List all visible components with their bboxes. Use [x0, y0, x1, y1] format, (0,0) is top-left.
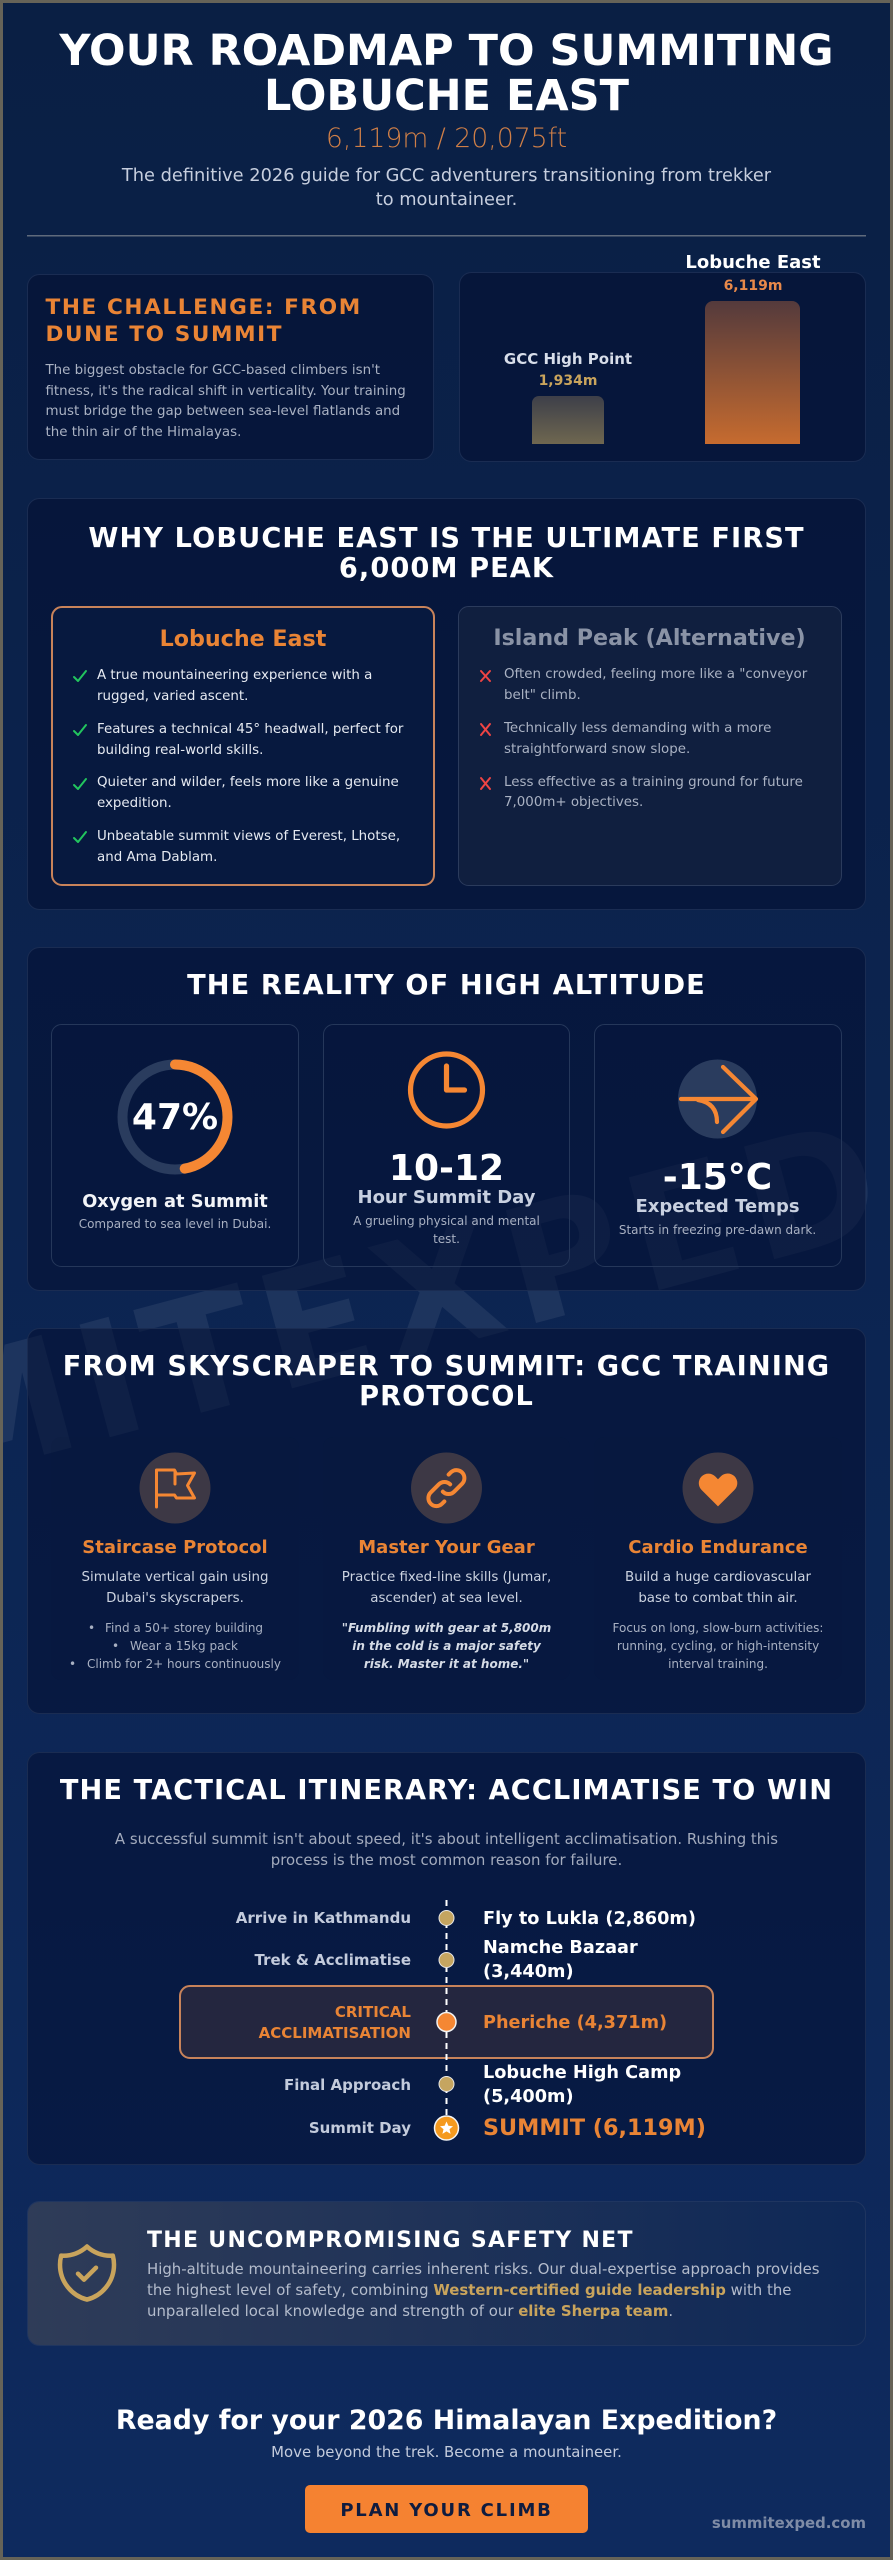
column: master your gear: ascender) at sea level. — [370, 1591, 523, 1606]
column: cardio endurance: Cardio Endurance — [628, 1537, 808, 1558]
icon: flag — [140, 1452, 210, 1524]
quote: risk. Master it at home." — [364, 1657, 529, 1671]
column: master your gear: Master Your Gear — [358, 1537, 535, 1558]
quote: "Fumbling with gear at 5,800m — [342, 1621, 551, 1635]
section heading: THE TACTICAL ITINERARY: ACCLIMATISE TO WIN — [60, 1775, 833, 1806]
bar: Lobuche East: Lobuche East — [685, 252, 821, 273]
CTA heading: Ready for your 2026 Himalayan Expedition? — [116, 2405, 777, 2436]
cross list: straightforward snow slope. — [504, 742, 690, 757]
column: staircase protocol: Staircase Protocol — [82, 1537, 268, 1558]
challenge text — [44, 363, 406, 440]
watermark — [3, 1141, 868, 1454]
critical highlight box — [180, 1986, 713, 2058]
cross list: Less effective as a training ground for future — [504, 775, 803, 790]
call to action — [116, 2405, 777, 2533]
icon: link — [411, 1452, 482, 1524]
stop: Pheriche: CRITICAL — [335, 2003, 411, 2021]
stop: Lobuche High Camp: Final Approach — [284, 2076, 411, 2094]
column: cardio endurance: running, cycling, or high-intensity — [617, 1639, 819, 1653]
section heading: WHY LOBUCHE EAST IS THE ULTIMATE FIRST — [88, 523, 805, 554]
bullet list: • — [112, 1639, 119, 1653]
icon: heart — [682, 1452, 754, 1524]
challenge heading: THE CHALLENGE: FROM — [46, 295, 362, 320]
donut chart 47%: 47% — [132, 1097, 218, 1138]
challenge text: must bridge the gap between sea-level flatlands and — [46, 404, 400, 419]
check list: building real-world skills. — [97, 743, 263, 758]
panel: the reality of high altitude — [28, 948, 866, 1290]
stop: summit — [309, 2115, 706, 2141]
cross list: Often crowded, feeling more like a "conveyor — [504, 667, 808, 682]
stop: Lobuche High Camp — [284, 2063, 681, 2107]
column: cardio endurance: interval training. — [668, 1657, 768, 1671]
panel: GCC training protocol — [28, 1328, 866, 1714]
section heading — [63, 1351, 830, 1412]
icon: shield — [60, 2247, 114, 2300]
challenge heading: DUNE TO SUMMIT — [46, 322, 283, 347]
quote — [342, 1621, 551, 1671]
column: staircase protocol: Simulate vertical gain using — [82, 1570, 268, 1585]
stop: Kathmandu / Lukla — [236, 1909, 696, 1929]
stop: Namche Bazaar: (3,440m) — [483, 1962, 574, 1982]
tagline: The definitive 2026 guide for GCC adventurers transitioning from trekker — [121, 165, 772, 186]
check list: Quieter and wilder, feels more like a genuine — [97, 775, 399, 790]
card: summit day: A grueling physical and mental — [353, 1214, 540, 1228]
bullet list: • — [88, 1621, 95, 1635]
card: oxygen: Compared to sea level in Dubai. — [79, 1217, 271, 1231]
panel: the challenge — [28, 274, 434, 460]
icon: clock — [410, 1054, 482, 1126]
stop: Namche Bazaar — [254, 1938, 638, 1982]
column: master your gear: Practice fixed-line skills (Jumar, — [342, 1570, 551, 1585]
cross list: belt" climb. — [504, 688, 581, 703]
column: cardio endurance: Focus on long, slow-burn activities: — [613, 1621, 823, 1635]
check list: Features a technical 45° headwall, perfect for — [97, 722, 404, 737]
safety heading: THE UNCOMPROMISING SAFETY NET — [147, 2228, 634, 2253]
CTA button: PLAN YOUR CLIMB — [340, 2500, 553, 2521]
safety text: unparalleled local knowledge and strength of our elite Sherpa team. — [147, 2302, 673, 2320]
safety text: the highest level of safety, combining Western-certified guide leadership with the — [147, 2281, 791, 2299]
card: temperature: Starts in freezing pre-dawn dark. — [619, 1223, 816, 1237]
card: Lobuche East: Lobuche East — [160, 626, 327, 652]
card: summit day — [324, 1024, 570, 1266]
section heading: 6,000M PEAK — [339, 553, 554, 584]
panel: altitude bar chart — [460, 252, 866, 462]
column: staircase protocol: Dubai's skyscrapers. — [106, 1591, 244, 1606]
bullet list — [69, 1621, 281, 1671]
bullet list: • — [69, 1657, 76, 1671]
card: Island Peak: Island Peak (Alternative) — [493, 625, 806, 651]
section heading: FROM SKYSCRAPER TO SUMMIT: GCC TRAINING — [63, 1351, 830, 1382]
tagline: to mountaineer. — [376, 189, 517, 210]
bullet list: Climb for 2+ hours continuously — [87, 1657, 281, 1671]
tagline — [121, 165, 772, 210]
check list: and Ama Dablam. — [97, 850, 217, 865]
card: temperature: Expected Temps — [635, 1196, 800, 1217]
header — [58, 26, 834, 210]
card: temperature: -15°C — [663, 1157, 772, 1198]
section heading: THE REALITY OF HIGH ALTITUDE — [187, 970, 706, 1001]
stop: Lobuche High Camp: (5,400m) — [483, 2087, 574, 2107]
card: summit day: test. — [433, 1232, 460, 1246]
quote: in the cold is a major safety — [352, 1639, 542, 1653]
stop: Pheriche — [259, 2003, 667, 2042]
section heading: PROTOCOL — [359, 1381, 534, 1412]
bar: Lobuche East: 6,119m — [724, 278, 782, 294]
icon: cold arrow — [678, 1060, 757, 1138]
bullet list: Wear a 15kg pack — [130, 1639, 238, 1653]
stop: Pheriche: Pheriche (4,371m) — [483, 2013, 667, 2033]
stop: Pheriche: ACCLIMATISATION — [259, 2024, 411, 2042]
cross list: 7,000m+ objectives. — [504, 795, 643, 810]
check list: A true mountaineering experience with a — [97, 668, 372, 683]
card: oxygen: Oxygen at Summit — [82, 1191, 268, 1212]
panel: tactical itinerary — [28, 1752, 866, 2164]
card: Island Peak — [458, 606, 842, 886]
card: summit day: Hour Summit Day — [358, 1187, 536, 1208]
bar: GCC high point: GCC High Point — [504, 350, 632, 368]
title — [58, 26, 834, 121]
card: Lobuche East — [52, 607, 434, 885]
card: oxygen — [52, 1024, 298, 1266]
challenge text: The biggest obstacle for GCC-based climbers isn't — [44, 363, 380, 378]
intro text — [115, 1830, 778, 1869]
stop: Kathmandu / Lukla: Arrive in Kathmandu — [236, 1909, 411, 1927]
check list: rugged, varied ascent. — [97, 689, 248, 704]
section heading — [88, 523, 805, 584]
column: cardio endurance — [594, 1437, 842, 1680]
panel: safety net — [28, 2202, 866, 2346]
title: YOUR ROADMAP TO SUMMITING — [58, 26, 834, 76]
safety text: High-altitude mountaineering carries inherent risks. Our dual-expertise approach provides — [147, 2260, 820, 2278]
column: cardio endurance: Build a huge cardiovascular — [625, 1570, 811, 1585]
cross list: Technically less demanding with a more — [503, 721, 771, 736]
stop: Namche Bazaar: Trek & Acclimatise — [254, 1951, 411, 1969]
bar: GCC high point — [504, 350, 632, 444]
check list — [74, 668, 404, 865]
timeline line — [446, 1900, 448, 2141]
intro text: process is the most common reason for failure. — [271, 1851, 622, 1869]
stop: summit: Summit Day — [309, 2119, 411, 2137]
column: cardio endurance: base to combat thin air. — [638, 1591, 798, 1606]
check list: Unbeatable summit views of Everest, Lhotse, — [97, 829, 400, 844]
challenge text: the thin air of the Himalayas. — [46, 425, 241, 440]
challenge heading — [46, 295, 362, 347]
column: staircase protocol — [51, 1437, 299, 1680]
panel: why Lobuche East — [28, 498, 866, 910]
bar: Lobuche East — [685, 252, 821, 444]
title: LOBUCHE EAST — [264, 71, 630, 121]
challenge text: fitness, it's the radical shift in verticality. Your training — [46, 384, 406, 399]
CTA button — [305, 2485, 588, 2533]
website credit: summitexped.com — [712, 2514, 866, 2532]
column: master your gear — [323, 1437, 570, 1680]
check list: expedition. — [97, 796, 172, 811]
stop: summit: SUMMIT (6,119M) — [483, 2115, 706, 2141]
cross list — [481, 667, 808, 810]
stop: Namche Bazaar: Namche Bazaar — [483, 1938, 638, 1958]
intro text: A successful summit isn't about speed, it's about intelligent acclimatisation. Rushing this — [115, 1830, 778, 1848]
bullet list: Find a 50+ storey building — [105, 1621, 263, 1635]
altitude subtitle: 6,119m / 20,075ft — [326, 123, 567, 154]
card: summit day: 10-12 — [389, 1148, 504, 1189]
card: temperature — [594, 1024, 842, 1266]
stop: Kathmandu / Lukla: Fly to Lukla (2,860m) — [483, 1909, 696, 1929]
bar: GCC high point: 1,934m — [539, 373, 597, 389]
safety text — [147, 2260, 820, 2320]
CTA subtext: Move beyond the trek. Become a mountaineer. — [271, 2443, 622, 2461]
stop: Lobuche High Camp: Lobuche High Camp — [483, 2063, 681, 2083]
donut chart 47% — [122, 1064, 228, 1170]
